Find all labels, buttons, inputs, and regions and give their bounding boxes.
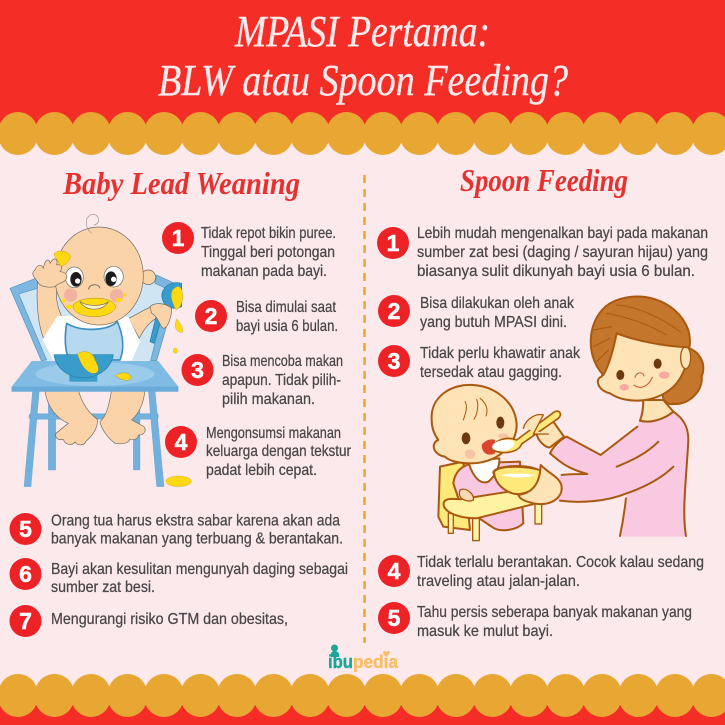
item 5: banyak makanan yang terbuang & berantakan. bbox=[51, 530, 343, 548]
item 3: 3 bbox=[191, 357, 204, 383]
logo: iBupedia bbox=[328, 644, 399, 672]
item 3: Tidak perlu khawatir anak bbox=[420, 345, 581, 362]
item 2 bbox=[195, 299, 338, 335]
item 4: 4 bbox=[175, 429, 188, 455]
item 1 bbox=[162, 222, 336, 280]
item 6 bbox=[10, 558, 348, 596]
item 4 bbox=[378, 554, 704, 590]
bowl bbox=[493, 466, 546, 494]
item 5: 5 bbox=[19, 516, 32, 542]
logo: iBupedia: ibu bbox=[328, 652, 353, 672]
raised hand with food bbox=[33, 251, 71, 287]
baby bbox=[432, 385, 523, 530]
mother face and hair bbox=[591, 296, 691, 401]
item 4: traveling atau jalan-jalan. bbox=[417, 573, 580, 590]
mother arms bbox=[518, 422, 677, 504]
chair legs bbox=[24, 390, 164, 487]
illustration: mother spoon feeding baby bbox=[432, 296, 703, 541]
arms and shirt bbox=[37, 280, 163, 361]
item 5: masuk ke mulut bayi. bbox=[417, 623, 553, 640]
item 5: Orang tua harus ekstra sabar karena akan ada bbox=[51, 512, 340, 530]
item 1 bbox=[377, 225, 708, 280]
item 2: 2 bbox=[205, 303, 217, 329]
title: BLW atau Spoon Feeding? bbox=[158, 56, 568, 105]
item 1: Tidak repot bikin puree. bbox=[201, 225, 336, 242]
item 3 bbox=[378, 345, 581, 381]
illustration: baby in high chair bbox=[10, 214, 191, 487]
item 6: Bayi akan kesulitan mengunyah daging sebagai bbox=[51, 561, 348, 578]
title: MPASI Pertama: bbox=[234, 7, 490, 56]
item 2: bayi usia 6 bulan. bbox=[236, 318, 338, 335]
item 4: padat lebih cepat. bbox=[206, 462, 317, 479]
item 2: Bisa dimulai saat bbox=[236, 299, 336, 316]
divider bbox=[363, 175, 366, 643]
item 3: 3 bbox=[388, 348, 400, 374]
item 7: 7 bbox=[19, 608, 32, 634]
title bbox=[158, 7, 568, 105]
header band bbox=[0, 0, 725, 155]
item 2 bbox=[378, 295, 575, 331]
spoon bbox=[491, 411, 560, 453]
high chair tray bbox=[444, 488, 542, 541]
panel: Baby Lead Weaning bbox=[10, 165, 352, 637]
head bbox=[55, 214, 156, 325]
footer band bbox=[0, 674, 725, 725]
item 3: apapun. Tidak pilih- bbox=[222, 372, 341, 389]
item 6: sumber zat besi. bbox=[51, 579, 155, 596]
chair back bbox=[10, 275, 178, 361]
spoon in right hand bbox=[150, 283, 183, 343]
item 4: keluarga dengan tekstur bbox=[206, 443, 352, 460]
item 7: Mengurangi risiko GTM dan obesitas, bbox=[51, 611, 288, 628]
mother hair bun bbox=[663, 347, 703, 404]
item 2: Bisa dilakukan oleh anak bbox=[420, 295, 575, 312]
item 1: Tinggal beri potongan bbox=[201, 244, 335, 261]
item 1: 1 bbox=[172, 225, 185, 251]
item 3: tersedak atau gagging. bbox=[420, 364, 562, 381]
food splatters bbox=[166, 319, 191, 487]
item 2: yang butuh MPASI dini. bbox=[420, 314, 567, 331]
item 7 bbox=[10, 605, 288, 637]
heading: Baby Lead Weaning: Baby Lead Weaning bbox=[62, 165, 300, 201]
panel: Spoon Feeding bbox=[377, 162, 708, 640]
baby legs and feet bbox=[45, 390, 145, 445]
item 2: 2 bbox=[388, 298, 400, 324]
item 6: 6 bbox=[19, 561, 32, 587]
mother body bbox=[620, 400, 688, 537]
heading: Spoon Feeding: Spoon Feeding bbox=[460, 162, 628, 198]
item 5 bbox=[378, 602, 692, 640]
item 3: pilih makanan. bbox=[222, 391, 315, 408]
item 4: Mengonsumsi makanan bbox=[206, 425, 341, 442]
item 4 bbox=[165, 425, 352, 479]
item 3: Bisa mencoba makan bbox=[222, 353, 343, 370]
item 1: biasanya sulit dikunyah bayi usia 6 bulan. bbox=[417, 263, 695, 280]
tray bbox=[12, 352, 178, 392]
item 1: makanan pada bayi. bbox=[201, 263, 327, 280]
item 4: 4 bbox=[388, 558, 401, 584]
logo: iBupedia: pedia bbox=[353, 652, 399, 672]
item 5 bbox=[10, 512, 343, 548]
item 1: 1 bbox=[387, 230, 400, 256]
item 5: 5 bbox=[388, 605, 401, 631]
item 3 bbox=[182, 353, 343, 408]
